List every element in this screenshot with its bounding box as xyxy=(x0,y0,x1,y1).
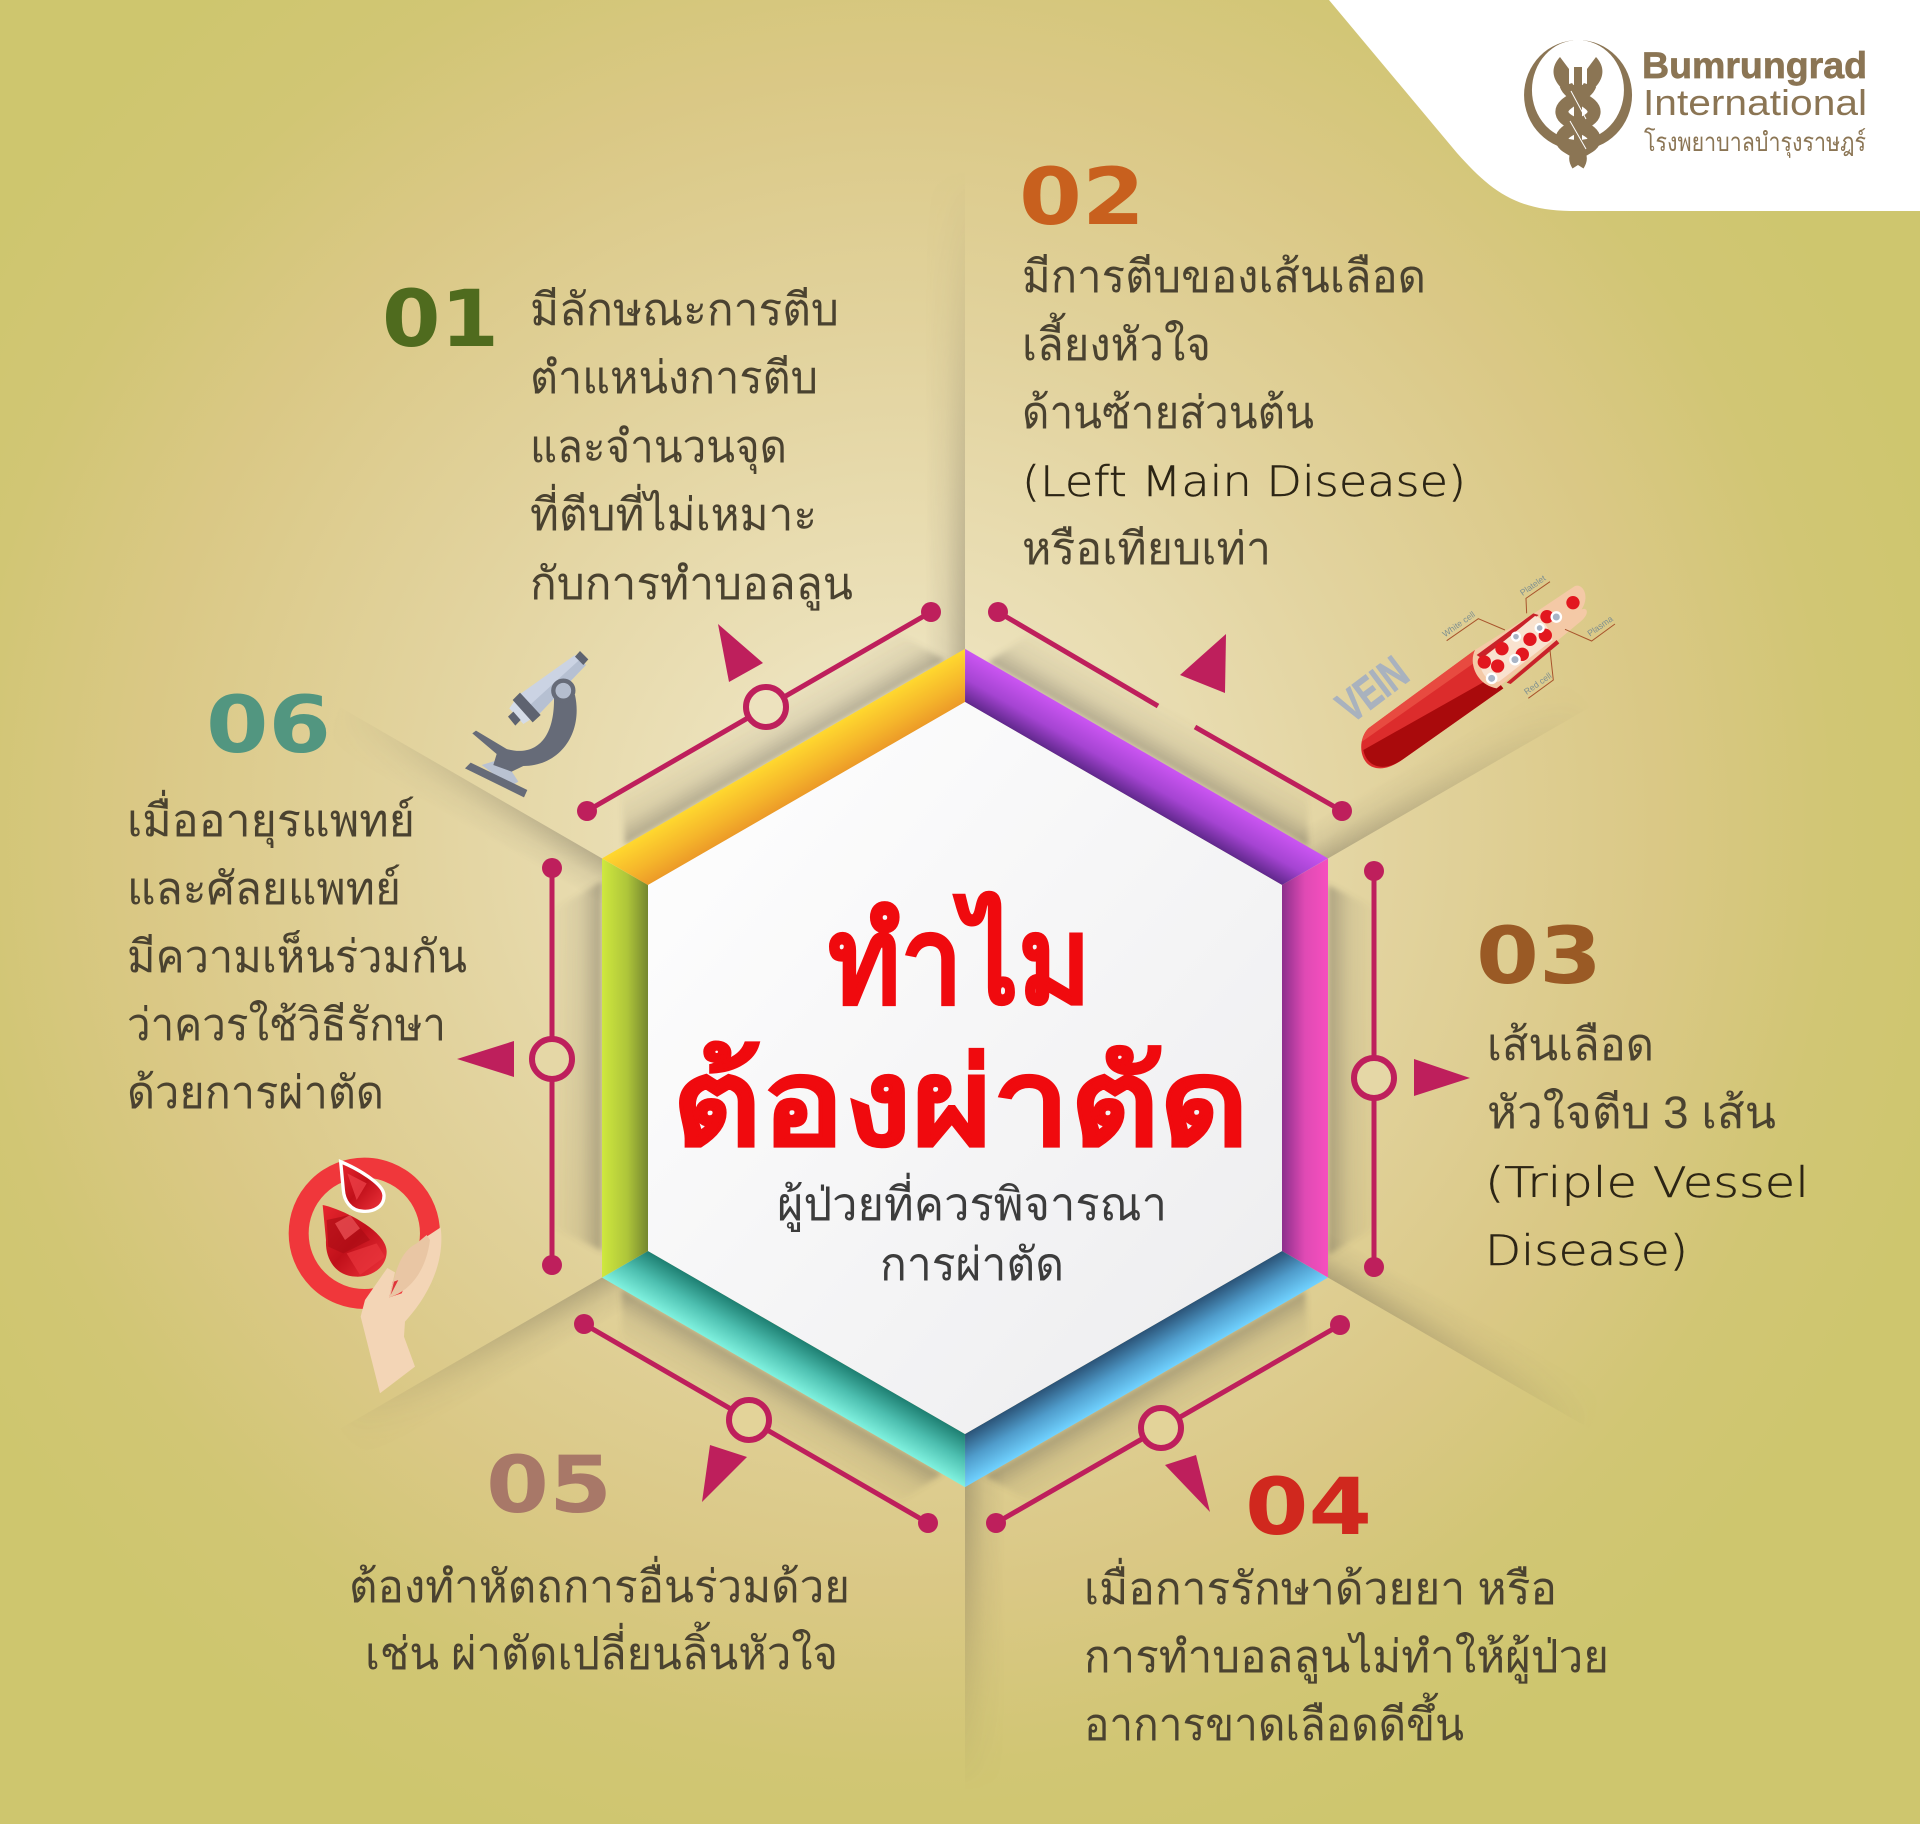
text block 02: เลี้ยงหัวใจ xyxy=(1022,312,1211,370)
text block 06: และศัลยแพทย์ xyxy=(127,863,401,914)
central hexagon xyxy=(602,649,1328,1487)
text block 05 xyxy=(349,1555,850,1679)
connector 01 xyxy=(577,602,941,821)
text block 01: และจำนวนจุด xyxy=(530,421,787,474)
text block 04: เมื่อการรักษาด้วยยา หรือ xyxy=(1084,1557,1557,1614)
text block 01: มีลักษณะการตีบ xyxy=(530,284,839,335)
panel 03 xyxy=(1476,912,1809,1275)
radial divider shadows xyxy=(384,249,1546,1737)
title xyxy=(672,892,1249,1290)
logo text: Bumrungrad: Bumrungrad xyxy=(1642,45,1867,86)
text block 06: ด้วยการผ่าตัด xyxy=(127,1067,384,1118)
title line 2: ต้องผ่าตัด xyxy=(672,1035,1249,1171)
text block 06: มีความเห็นร่วมกัน xyxy=(127,930,467,982)
text block 03: หัวใจตีบ 3 เส้น xyxy=(1487,1087,1776,1138)
subtitle line 1: ผู้ป่วยที่ควรพิจารณา xyxy=(777,1172,1167,1232)
number 01: 01 xyxy=(382,275,499,365)
icon: vein with blood cells xyxy=(1327,573,1615,768)
number 02: 02 xyxy=(1019,153,1145,243)
label: Platelet: Platelet xyxy=(1518,573,1548,598)
panel 02 xyxy=(1019,153,1466,574)
text block 02 xyxy=(1022,251,1466,574)
text block 03: Disease) xyxy=(1485,1226,1688,1275)
number 05: 05 xyxy=(486,1441,612,1531)
hexagon edge: lime left xyxy=(602,858,648,1278)
text block 01: ที่ตีบที่ไม่เหมาะ xyxy=(530,483,817,540)
hexagon outer-edge shadows xyxy=(552,617,1378,1519)
VEIN label: VEIN xyxy=(1327,646,1418,732)
panel 04 xyxy=(1084,1463,1609,1750)
number 06: 06 xyxy=(206,681,331,771)
icon: microscope xyxy=(465,651,588,797)
white corner panel with logo xyxy=(1329,0,1920,211)
hexagon edge: purple upper right xyxy=(942,649,1328,898)
text block 02: หรือเทียบเท่า xyxy=(1022,523,1271,574)
text block 02: มีการตีบของเส้นเลือด xyxy=(1022,251,1426,302)
label: Red cell: Red cell xyxy=(1522,670,1553,697)
connector 02 xyxy=(988,602,1352,821)
panel 06 xyxy=(127,681,467,1118)
text block 05: เช่น ผ่าตัดเปลี่ยนลิ้นหัวใจ xyxy=(365,1621,838,1679)
number 04: 04 xyxy=(1245,1463,1372,1553)
text block 03 xyxy=(1485,1019,1809,1275)
text block 06 xyxy=(127,789,467,1118)
text block 01: ตำแหน่งการตีบ xyxy=(530,352,818,403)
hexagon edge: yellow upper left xyxy=(602,649,988,898)
title line 1: ทำไม xyxy=(828,892,1091,1029)
icon: blood donation hand xyxy=(299,1162,441,1393)
subtitle line 2: การผ่าตัด xyxy=(880,1238,1064,1290)
text block 02: ด้านซ้ายส่วนต้น xyxy=(1022,387,1314,438)
connector 04 xyxy=(986,1315,1350,1533)
label: White cell: White cell xyxy=(1440,609,1477,639)
text block 01 xyxy=(530,284,853,611)
text block 06: เมื่ออายุรแพทย์ xyxy=(127,789,415,848)
logo text: Thai hospital name: โรงพยาบาลบำรุงราษฎร์ xyxy=(1644,127,1866,158)
number 03: 03 xyxy=(1476,912,1602,1002)
text block 05: ต้องทำหัตถการอื่นร่วมด้วย xyxy=(349,1555,850,1612)
hexagon edge: teal lower left xyxy=(602,1238,988,1487)
text block 04: อาการขาดเลือดดีขึ้น xyxy=(1084,1692,1464,1750)
logo text: International: International xyxy=(1643,82,1867,123)
hexagon edge: blue lower right xyxy=(942,1238,1328,1487)
panel 01 xyxy=(382,275,853,611)
hexagon edge: pink right xyxy=(1282,858,1328,1278)
panel 05 xyxy=(349,1441,850,1679)
connector 03 xyxy=(1354,861,1470,1277)
text block 03: เส้นเลือด xyxy=(1487,1019,1654,1070)
text block 03: (Triple Vessel xyxy=(1485,1158,1809,1207)
icon: Bumrungrad caduceus emblem xyxy=(1524,33,1632,165)
label: Plasma: Plasma xyxy=(1585,613,1615,638)
text block 06: ว่าควรใช้วิธีรักษา xyxy=(127,999,446,1050)
connector 05 xyxy=(574,1314,938,1533)
text block 04 xyxy=(1084,1557,1609,1750)
text block 01: กับการทำบอลลูน xyxy=(530,558,853,611)
connector 06 xyxy=(457,858,572,1275)
text block 02: (Left Main Disease) xyxy=(1022,457,1466,506)
hexagon white face xyxy=(648,702,1282,1434)
text block 04: การทำบอลลูนไม่ทำให้ผู้ป่วย xyxy=(1084,1631,1609,1684)
